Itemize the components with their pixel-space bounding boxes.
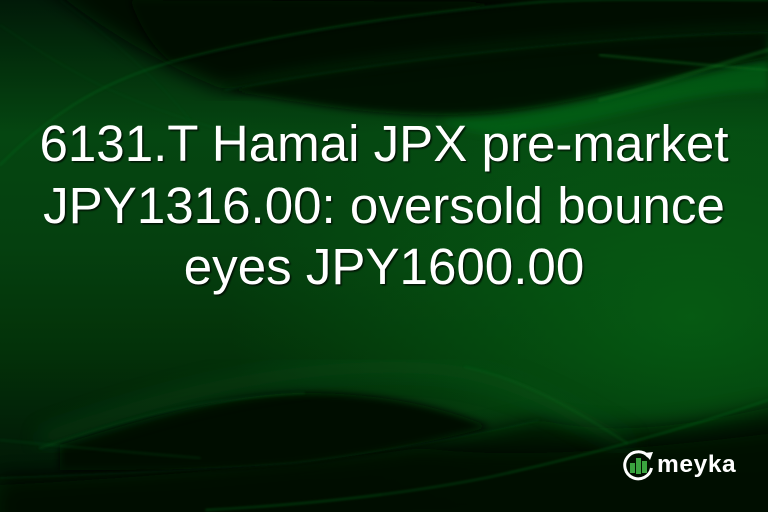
title: JPY1316.00: oversold bounce [43, 176, 725, 234]
title: eyes JPY1600.00 [184, 238, 584, 295]
wordmark: meyka [657, 451, 736, 478]
upper right lighter band [441, 62, 768, 135]
top dark area [40, 0, 768, 90]
title [39, 115, 730, 296]
icon: ring with green bars [625, 452, 653, 479]
logo: meyka [623, 450, 736, 480]
title: 6131.T Hamai JPX pre-market [39, 115, 729, 172]
mid-lower soft wave [40, 367, 630, 445]
upper dark lens [225, 32, 768, 115]
bottom dark hump [60, 393, 490, 470]
bottom dark base [0, 400, 768, 512]
